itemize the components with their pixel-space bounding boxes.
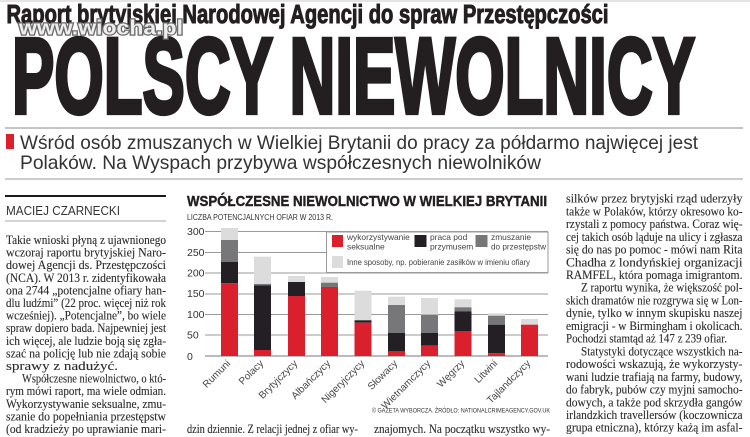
bar: Polacy: [254, 257, 271, 356]
lede: Wśród osób zmuszanych w Wielkiej Brytanii do pracy za półdarmo najwięcej jest: [20, 132, 699, 154]
article column 3: dowych, a także pod skrzydła gangów: [566, 395, 743, 409]
y axis labels: 50: [187, 330, 199, 342]
legend: sexual exploitation: [332, 232, 410, 252]
article column 3: [566, 192, 743, 435]
bar: Słowacy: [388, 297, 405, 356]
article column 3: grupa etniczna), którzy każą im asfal-: [566, 421, 742, 435]
article column 1: rym mówi raport, ma wiele odmian.: [6, 384, 166, 398]
bar: Nigeryjczycy: [354, 291, 372, 356]
x axis labels: Tajlandczycy: [485, 358, 533, 406]
lede: Polaków. Na Wyspach przybywa współczesnych niewolników: [20, 152, 542, 174]
bar: Albańczycy: [321, 277, 338, 356]
article column 3: dynie, tylko w innym skupisku naszej: [566, 306, 742, 320]
x axis labels: Polacy: [237, 358, 266, 387]
legend: forced crime: [476, 232, 547, 252]
legend: other: Inne sposoby, np. pobieranie zasiłków w imieniu ofiary: [347, 257, 531, 267]
x axis labels: Nigeryjczycy: [320, 358, 367, 406]
article column 3: RAMFEL, która pomaga imigrantom.: [566, 268, 742, 282]
y axis labels: 200: [187, 268, 205, 280]
article column 3: Pochodzi stamtąd aż 147 z 239 ofiar.: [566, 332, 727, 346]
article column 1: Wykorzystywanie seksualne, zmu-: [6, 397, 166, 411]
article column 1: Takie wnioski płyną z ujawnionego: [6, 233, 166, 247]
article text under chart: [187, 422, 550, 436]
y axis labels: 150: [187, 288, 205, 300]
legend: [326, 232, 548, 272]
y axis labels: 0: [187, 351, 193, 363]
bar: Litwini: [488, 313, 505, 356]
bar: Wietnamczycy: [421, 298, 438, 356]
article column 3: silków przez brytyjski rząd uderzyły: [566, 192, 743, 206]
bar: Tajlandczycy: [521, 319, 538, 356]
article column 1: dlu ludźmi” (22 proc. więcej niż rok: [6, 296, 167, 310]
chart subtitle: LICZBA POTENCJALNYCH OFIAR W 2013 R.: [187, 213, 333, 222]
legend: forced labour: [414, 232, 473, 252]
chart credit: © GAZETA WYBORCZA. ŹRÓDŁO: NATIONALCRIMEAGENCY.GOV.UK: [372, 406, 551, 414]
kicker heading: Raport brytyjskiej Narodowej Agencji do spraw Przestępczości: [6, 1, 608, 29]
x axis labels: Brytyjczycy: [257, 358, 300, 401]
article column 1: szać na policję lub nie zdają sobie: [6, 346, 166, 360]
chart panel: [187, 192, 551, 414]
article column 1: [6, 233, 167, 436]
lede: [6, 132, 699, 174]
article column 1: (od kradzieży po uprawianie mari-: [6, 422, 166, 436]
y axis labels: [187, 226, 205, 363]
y axis labels: 300: [187, 226, 205, 238]
x axis labels: [201, 358, 533, 412]
bar: Brytyjczycy: [288, 276, 305, 356]
red square marker: [6, 134, 14, 149]
article column 1: spraw dopiero bada. Najpewniej jest: [6, 321, 166, 335]
article column 1: ich więcej, ale ludzie boją się zgła-: [6, 334, 166, 348]
article column 1: wcześniej). „Potencjalne”, bo wiele: [6, 309, 166, 323]
bar: Węgrzy: [454, 299, 472, 356]
article column 1: dowej Agencji ds. Przestępczości: [6, 258, 167, 272]
article column 1: ona 2744 „potencjalne ofiary han-: [6, 283, 166, 297]
article column 1: Współczesne niewolnictwo, o któ-: [22, 372, 166, 386]
article text under chart: znajomych. Na początku wszystko wy-: [374, 422, 550, 436]
legend: sexual exploitation: wykorzystywanie: [346, 232, 410, 242]
x axis labels: Wietnamczycy: [380, 358, 433, 412]
byline: MACIEJ CZARNECKI: [6, 203, 120, 218]
article column 1: sprawy z nadużyć.: [6, 359, 118, 373]
y axis labels: 250: [187, 247, 205, 259]
x axis labels: Litwini: [473, 358, 500, 386]
legend: forced labour: praca pod: [430, 232, 468, 242]
article column 3: rodowości wskazują, że wykorzysty-: [566, 357, 742, 371]
article text under chart: dzin dziennie. Z relacji jednej z ofiar wy-: [187, 422, 358, 436]
watermark: www.wiocha.pl: [18, 16, 183, 40]
article column 1: (NCA). W 2013 r. zidentyfikowała: [6, 271, 166, 285]
x axis labels: Słowacy: [366, 358, 400, 392]
x axis labels: Albańczycy: [290, 358, 333, 402]
article column 3: się do nas po pomoc - mówi nam Rita: [566, 243, 743, 257]
article column 1: szanie do popełniania przestępstw: [6, 409, 166, 423]
legend: forced labour: przymusem: [430, 242, 473, 252]
x axis labels: Węgrzy: [435, 358, 467, 390]
article column 3: Chadha z londyńskiej organizacji: [566, 255, 743, 269]
chart title: WSPÓŁCZESNE NIEWOLNICTWO W WIELKIEJ BRYTANII: [187, 192, 547, 210]
article column 1: wczoraj raportu brytyjskiej Naro-: [6, 246, 166, 260]
x axis labels: Rumuni: [201, 358, 233, 390]
legend: forced crime: do przestępstw: [491, 242, 547, 252]
bar: Rumuni: [221, 228, 238, 356]
legend: sexual exploitation: seksualne: [347, 242, 385, 252]
legend: forced crime: zmuszanie: [491, 232, 531, 242]
y axis labels: 100: [187, 309, 205, 321]
